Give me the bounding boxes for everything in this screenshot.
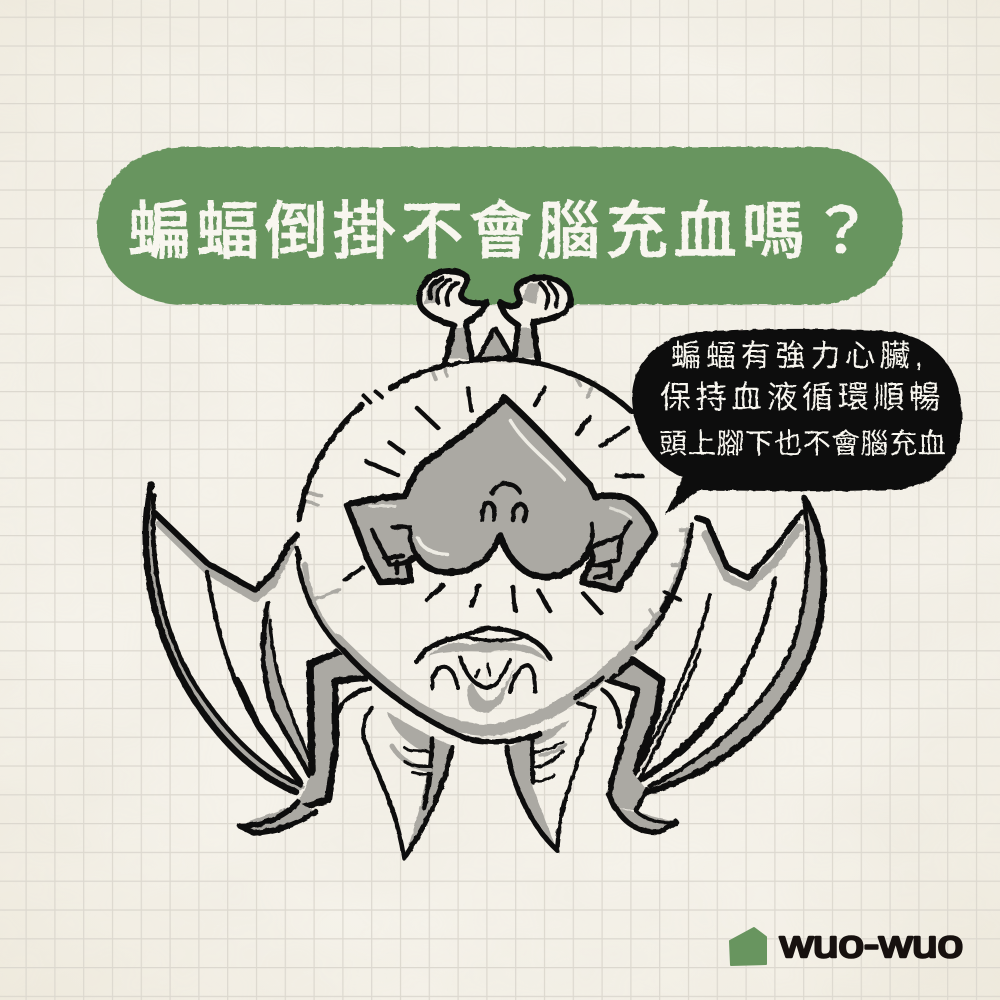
- heart highlights: [510, 420, 565, 480]
- right leg membrane: [507, 703, 595, 850]
- nostrils: [482, 503, 494, 520]
- nose brow: [492, 484, 520, 493]
- title: 蝙蝠倒掛不會腦充血嗎？: [128, 197, 873, 267]
- right wing: [634, 498, 824, 792]
- logo wordmark: wuo-wuo: [779, 924, 963, 966]
- title banner: [97, 147, 903, 304]
- icon: left foot: [419, 271, 487, 363]
- icon: right foot: [500, 278, 571, 360]
- body circle: [297, 359, 692, 742]
- hands and tail: [419, 271, 571, 363]
- left wing: [146, 482, 312, 792]
- logo: [730, 924, 963, 966]
- tail: [477, 328, 512, 360]
- mouth: [417, 628, 550, 713]
- left leg membrane: [363, 708, 452, 858]
- speech bubble: [632, 329, 962, 515]
- bubble text: 保持血液循環順暢: [660, 380, 940, 415]
- left arm and claw: [240, 650, 370, 833]
- sun rays: [345, 388, 642, 613]
- arm details: [372, 527, 417, 573]
- bat illustration: [146, 271, 824, 858]
- bubble text: 蝙蝠有強力心臟,: [671, 340, 923, 373]
- heart and arms: [347, 398, 655, 590]
- icon: house: [730, 928, 766, 965]
- bubble text: 頭上腳下也不會腦充血: [659, 428, 946, 459]
- right arm and claw: [603, 660, 677, 832]
- bubble text: [659, 340, 946, 459]
- heart with arms silhouette: [347, 398, 655, 590]
